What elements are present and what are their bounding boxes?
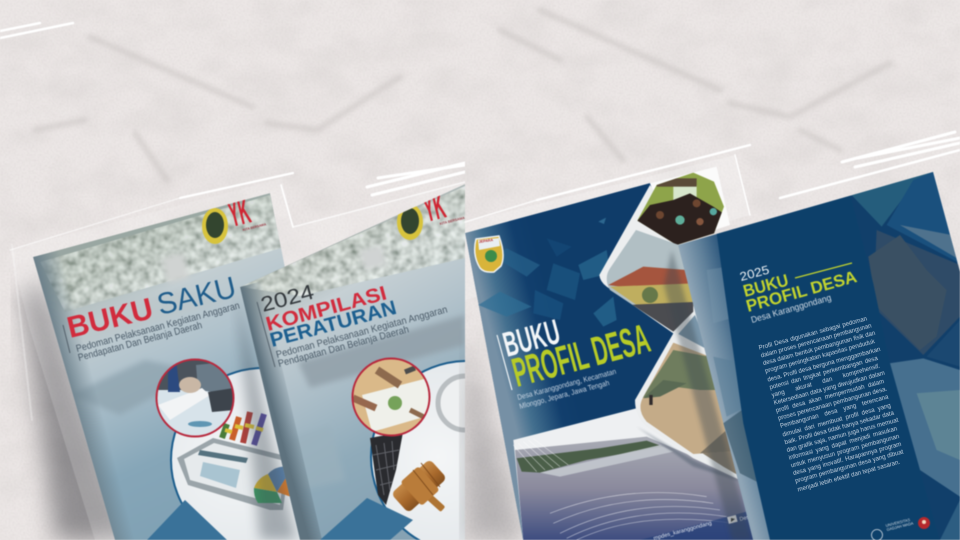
heading: Buku Saku: BUKU	[64, 292, 156, 345]
heading: Buku Profil Desa	[499, 312, 655, 396]
text block: Profil Desa description: menjadi lebih efektif dan tepat sasaran.	[797, 458, 901, 493]
text block: Profil Desa description: untuk menyusun program pembangunan	[790, 433, 900, 470]
heading: Buku Profil Desa: BUKU	[499, 312, 564, 365]
text block: Profil Desa description: desa. Profil desa berguna menggambarkan	[767, 346, 881, 383]
text block: Profil Desa description: Profil Desa digunakan sebagai pedoman	[758, 315, 868, 352]
heading: 2024 Kompilasi Peraturan: 2024	[258, 281, 317, 317]
white circle with ring	[369, 359, 466, 540]
text block: Profil Desa description: program pembangunan desa yang dibuat	[795, 449, 904, 485]
logos: crest and YK: KITA BERSAMA	[242, 222, 267, 232]
heading: Buku Saku: SAKU	[154, 271, 239, 322]
text panel	[716, 195, 880, 540]
text block: Profil Desa description	[758, 315, 904, 493]
text block: Profil Desa description: program peningkatan kapasitas penduduk	[764, 339, 876, 375]
red circle photo	[352, 358, 434, 436]
logos: crest and YK	[396, 195, 466, 241]
text block: Profil Desa description: Pembangunan desa yang terencana	[779, 394, 889, 430]
subtitle: Pendapatan Dan Belanja Daerah	[277, 324, 410, 370]
footer logos: GADJAH MADA	[886, 521, 914, 532]
heading: 2024 Kompilasi Peraturan: KOMPILASI	[264, 282, 389, 336]
text block: Profil Desa description: profil desa akan mempermudah dalam	[775, 378, 885, 415]
subtitle: Pedoman Pelaksanaan Kegiatan Anggaran	[275, 304, 449, 361]
photo triangles	[707, 163, 960, 540]
heading: 2025 Buku Profil Desa: 2025	[738, 263, 771, 284]
book: Kompilasi Peraturan	[240, 184, 466, 540]
book shadow	[236, 290, 296, 540]
book: Buku Profil Desa back cover	[678, 163, 960, 540]
crest: Jepara: JEPARA	[479, 238, 494, 244]
pie chart	[253, 466, 290, 504]
footer social: Des	[739, 515, 750, 523]
book: Buku Profil Desa cover	[464, 167, 754, 540]
keyboard	[370, 432, 403, 505]
text block: Profil Desa description: baik. Profil desa tidak hanya sekadar data	[784, 409, 895, 446]
magnifier	[435, 373, 466, 433]
cover photo: city and building	[240, 186, 465, 490]
logos: crest and YK: KITA BERSAMA	[439, 216, 466, 226]
bottom blue corner	[320, 498, 413, 540]
heading: 2025 Buku Profil Desa: Desa Karanggondang	[750, 292, 832, 325]
footer logos: UNIVERSITAS	[885, 518, 911, 528]
book shadow	[465, 340, 525, 540]
dim spine photos	[714, 356, 740, 416]
subtitle: Desa Karanggondang, Kecamatan	[516, 367, 617, 402]
panel: left mockup books	[0, 23, 563, 540]
crest: Jepara	[475, 236, 503, 272]
plastic glare	[465, 132, 960, 222]
plastic sleeve	[465, 155, 750, 300]
book shadow	[664, 250, 752, 540]
book: Buku Saku	[32, 192, 298, 540]
subtitle: Mlonggo, Jepara, Jawa Tengah	[518, 378, 610, 411]
heading: 2025 Buku Profil Desa: BUKU	[741, 271, 790, 301]
subtitle: Pendapatan Dan Belanja Daerah	[77, 320, 203, 364]
logos: crest and YK: YK	[224, 190, 255, 236]
white circle with ring	[170, 366, 300, 540]
text block: Profil Desa description: informasi yang dapat menjadi masukan	[788, 425, 898, 462]
text block: Profil Desa description: dimulai dari membuat profil desa yang	[782, 402, 892, 438]
gavel	[391, 459, 447, 513]
logos: crest and YK: YK	[419, 185, 450, 231]
white sleeve behind hexagon	[650, 167, 730, 243]
heading: Buku Profil Desa: PROFIL DESA	[507, 315, 655, 396]
text block: Profil Desa description: dalam proses perencanaan pembangunan	[760, 323, 872, 360]
plastic sleeve	[22, 284, 114, 540]
text block: Profil Desa description: dan grafik saja, namun juga harus memuat	[786, 417, 899, 454]
tablet with charts	[177, 438, 290, 510]
heading: 2024 Kompilasi Peraturan: PERATURAN	[268, 297, 399, 352]
logos: crest and YK	[201, 199, 266, 245]
bar chart	[222, 412, 264, 445]
text block: Profil Desa description: potensi dan tingkat perkembangan desa	[769, 355, 879, 391]
text block: Profil Desa description: desa yang inovatif. Harapannya program	[792, 441, 902, 477]
red circle photo	[155, 358, 235, 436]
heading: Buku Saku	[66, 276, 235, 338]
text block: Profil Desa description: Ketersediaan data yang diwujudkan dalam	[773, 370, 886, 407]
bottom blue corner	[147, 500, 227, 540]
cover photo: city	[40, 195, 281, 415]
footer social	[653, 515, 750, 540]
book shadow	[22, 285, 135, 540]
geometric pattern	[478, 218, 617, 327]
text block: Profil Desa description: desa dalam bentuk pembangunan fisik dan	[762, 330, 876, 367]
heading: 2024 Kompilasi Peraturan	[260, 284, 397, 348]
beach photo	[513, 408, 773, 540]
subtitle: Pedoman Pelaksanaan Kegiatan Anggaran	[75, 301, 241, 355]
text block: Profil Desa description: yang akurat dan komprehensif.	[771, 363, 881, 399]
footer logos	[872, 517, 930, 540]
photo diamonds	[598, 167, 738, 480]
panel: right mockup books	[465, 132, 960, 540]
text block: Profil Desa description: proses perencanaan pembangunan desa.	[777, 386, 888, 422]
heading: 2025 Buku Profil Desa: PROFIL DESA	[744, 267, 859, 316]
